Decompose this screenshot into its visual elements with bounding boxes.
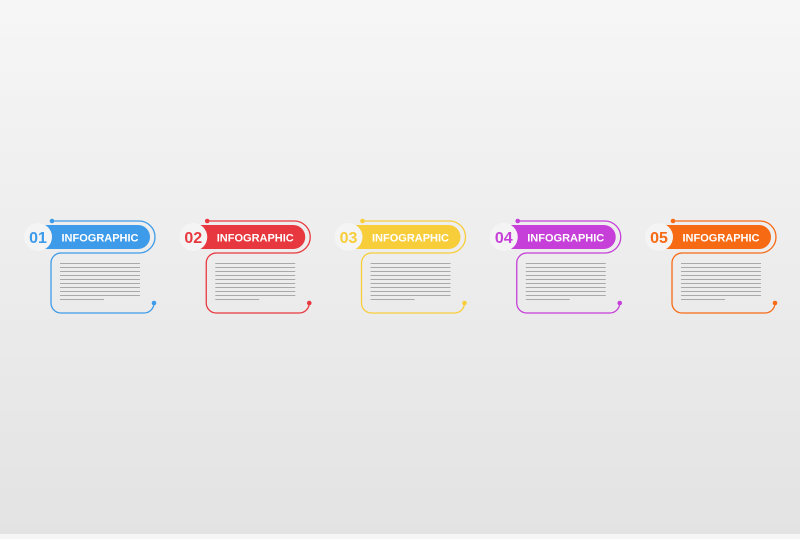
step 2: [179, 219, 312, 313]
step 2: INFOGRAPHIC: [217, 232, 294, 244]
step 4: INFOGRAPHIC: [527, 232, 604, 244]
pill: [40, 225, 150, 249]
step 1: INFOGRAPHIC: [62, 232, 139, 244]
step 2: 02: [184, 230, 202, 247]
outline: [51, 221, 155, 313]
number badge: [24, 223, 52, 251]
step 4: 04: [495, 230, 513, 247]
step 5: [645, 219, 777, 313]
step 1: [24, 219, 156, 313]
step 3: 03: [340, 230, 358, 247]
body text: [60, 263, 140, 300]
step 5: 05: [650, 230, 668, 247]
step 1: 01: [29, 230, 47, 247]
step 4: [490, 219, 622, 313]
step 3: INFOGRAPHIC: [372, 232, 449, 244]
step 5: INFOGRAPHIC: [682, 232, 760, 244]
step 3: [334, 219, 467, 313]
